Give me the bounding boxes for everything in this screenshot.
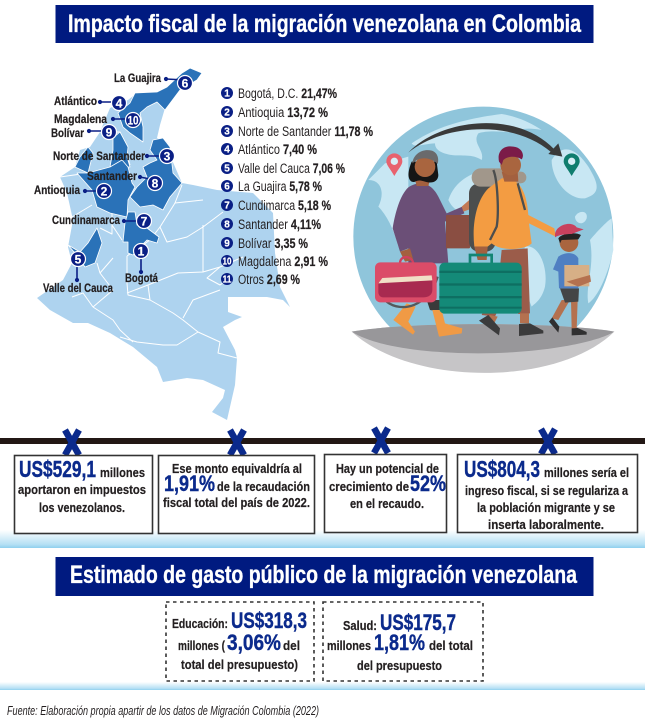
panel: educación: total del presupuesto)	[181, 657, 298, 672]
x clip 1	[65, 430, 79, 455]
x clip 3	[374, 428, 388, 453]
map markers and labels: 6	[182, 76, 189, 90]
map markers and labels: Valle del Cauca	[43, 281, 113, 295]
legend list of departments: 8	[224, 220, 230, 230]
legend list of departments: 9	[224, 238, 230, 250]
map markers and labels: Bolívar	[51, 126, 84, 140]
legend list of departments: Norte de Santander 11,78 %	[238, 124, 373, 139]
legend list of departments: Santander 4,11%	[238, 217, 321, 232]
title	[56, 5, 594, 43]
map markers and labels: Santander	[87, 169, 137, 183]
legend list of departments: 10	[222, 256, 232, 268]
panel: educación: millones (	[178, 638, 226, 653]
map markers and labels: 5	[75, 252, 82, 266]
map markers and labels: 8	[152, 176, 159, 190]
x clip 4	[541, 429, 555, 454]
legend list of departments: La Guajira 5,78 %	[238, 179, 322, 194]
map markers and labels: Cundinamarca	[52, 213, 120, 227]
source note: Fuente: Elaboración propia apartir de los datos de Migración Colombia (2022)	[7, 704, 319, 718]
card 1: los venezolanos.	[39, 500, 125, 515]
panel: salud: US$175,7	[380, 610, 456, 635]
map markers and labels: 7	[141, 214, 148, 228]
map of Colombia	[34, 68, 290, 420]
x clip 2	[230, 430, 244, 455]
red suitcase	[375, 257, 438, 307]
card 2: Ese monto equivaldría al	[172, 461, 302, 476]
green suitcase	[439, 255, 522, 314]
legend list of departments: Bogotá, D.C. 21,47%	[238, 86, 337, 101]
card 1: millones	[100, 465, 145, 480]
legend list of departments: Cundimarca 5,18 %	[238, 198, 331, 213]
globe	[353, 107, 613, 367]
panel: salud: 1,81%	[374, 630, 425, 655]
card 4: la población migrante y se	[477, 500, 615, 515]
card 4: US$804,3	[464, 456, 540, 482]
panel: educación: Educación:	[172, 616, 228, 631]
card 4	[458, 429, 638, 532]
card 2: 1,91%	[164, 471, 215, 496]
boy	[549, 224, 591, 335]
legend list of departments: 6	[224, 182, 230, 192]
map markers and labels: 2	[101, 184, 108, 198]
legend list of departments: 3	[224, 126, 230, 138]
woman	[393, 150, 472, 337]
panel: salud: del presupuesto	[357, 658, 442, 673]
legend list of departments: Otros 2,69 %	[238, 272, 300, 287]
card 3: en el recaudo.	[350, 496, 424, 511]
panel: educación: 3,06%	[227, 630, 281, 655]
legend list of departments: 1	[224, 88, 230, 100]
map markers and labels: 1	[138, 244, 145, 258]
map markers and labels: Magdalena	[54, 112, 107, 126]
map markers and labels: 3	[164, 150, 171, 164]
legend list of departments: Antioquia 13,72 %	[238, 105, 328, 120]
legend list of departments: 2	[224, 108, 230, 118]
legend list of departments: 4	[224, 144, 230, 156]
panel: salud: Salud:	[343, 618, 377, 633]
band under boxes	[0, 530, 645, 548]
map markers and labels: 9	[106, 126, 113, 140]
card 1	[14, 430, 152, 534]
location pins	[386, 153, 580, 176]
card 3: crecimiento de	[329, 479, 409, 494]
card 2: de la recaudación	[217, 479, 310, 494]
map markers and labels: 4	[116, 96, 123, 110]
map markers and labels: Atlántico	[54, 94, 97, 108]
legend list of departments: Magdalena 2,91 %	[238, 254, 328, 269]
timeline line	[0, 438, 645, 444]
panel: educación: US$318,3	[231, 608, 307, 633]
legend list of departments: 5	[224, 164, 230, 174]
panel: salud	[323, 602, 483, 681]
panel: salud: del total	[429, 638, 473, 653]
map markers and labels: 10	[128, 114, 139, 128]
ground	[352, 324, 614, 373]
card 2: fiscal total del país de 2022.	[163, 495, 310, 510]
panel: educación	[166, 602, 314, 681]
legend list of departments: 11	[222, 274, 232, 286]
bottom band	[0, 682, 645, 690]
arrow over globe	[408, 123, 562, 157]
legend list of departments: 7	[224, 200, 230, 212]
card 3: Hay un potencial de	[336, 461, 439, 476]
legend list of departments: Bolívar 3,35 %	[238, 236, 308, 251]
card 2	[158, 430, 314, 534]
panel: salud: millones	[327, 638, 371, 653]
card 4: inserta laboralmente.	[488, 517, 604, 532]
map markers and labels: Norte de Santander	[53, 149, 145, 163]
legend list of departments	[221, 86, 373, 287]
card 1: US$529,1	[19, 456, 96, 482]
map markers and labels: Bogotá	[125, 271, 158, 285]
card 3: 52%	[410, 471, 446, 496]
card 3	[324, 428, 446, 532]
legend list of departments: Atlántico 7,40 %	[238, 142, 317, 157]
map markers and labels	[34, 71, 192, 295]
panel: educación: del	[283, 638, 300, 653]
map markers and labels: La Guajira	[114, 71, 161, 85]
man	[469, 146, 556, 336]
legend list of departments: Valle del Cauca 7,06 %	[238, 161, 345, 176]
illustration: migrant family and globe	[352, 107, 614, 373]
card 1: aportaron en impuestos	[18, 482, 146, 497]
section heading: gasto público	[56, 557, 594, 596]
card 4: millones sería el	[544, 465, 629, 480]
map markers and labels: Antioquia	[34, 183, 80, 197]
